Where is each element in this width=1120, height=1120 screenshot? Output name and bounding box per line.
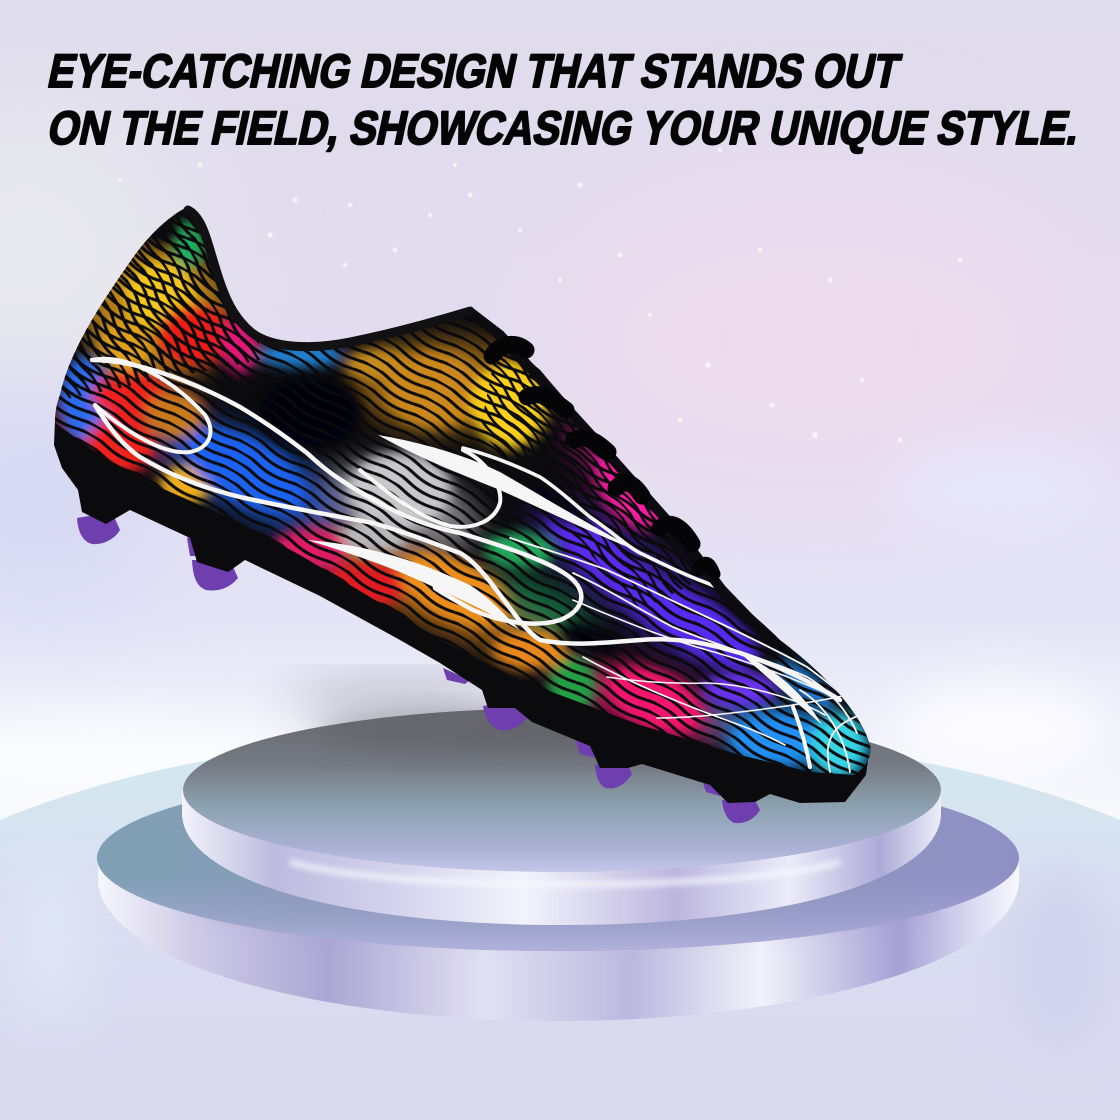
zebra stripes [55, 212, 870, 774]
saturated highlights [59, 221, 866, 777]
podium: upper tier [182, 708, 941, 925]
title: EYE-CATCHING DESIGN THAT STANDS OUT [44, 45, 905, 98]
studs [77, 512, 760, 823]
podium [97, 708, 1019, 1021]
white flame swooshes [92, 359, 867, 772]
laces [492, 344, 714, 574]
football boot [40, 190, 890, 823]
collar lining [188, 210, 470, 347]
title [44, 45, 1085, 155]
shoe shadow [290, 682, 510, 718]
wide colour wash [50, 240, 880, 786]
outsole [54, 420, 870, 803]
tongue and lace channel [470, 312, 770, 640]
sparkles [118, 118, 962, 442]
upper base colours [55, 208, 870, 775]
white flare tips [307, 435, 822, 725]
dark sheen areas [144, 222, 762, 663]
podium: cast shadow [190, 870, 930, 930]
podium: lower tier [97, 765, 1019, 1021]
